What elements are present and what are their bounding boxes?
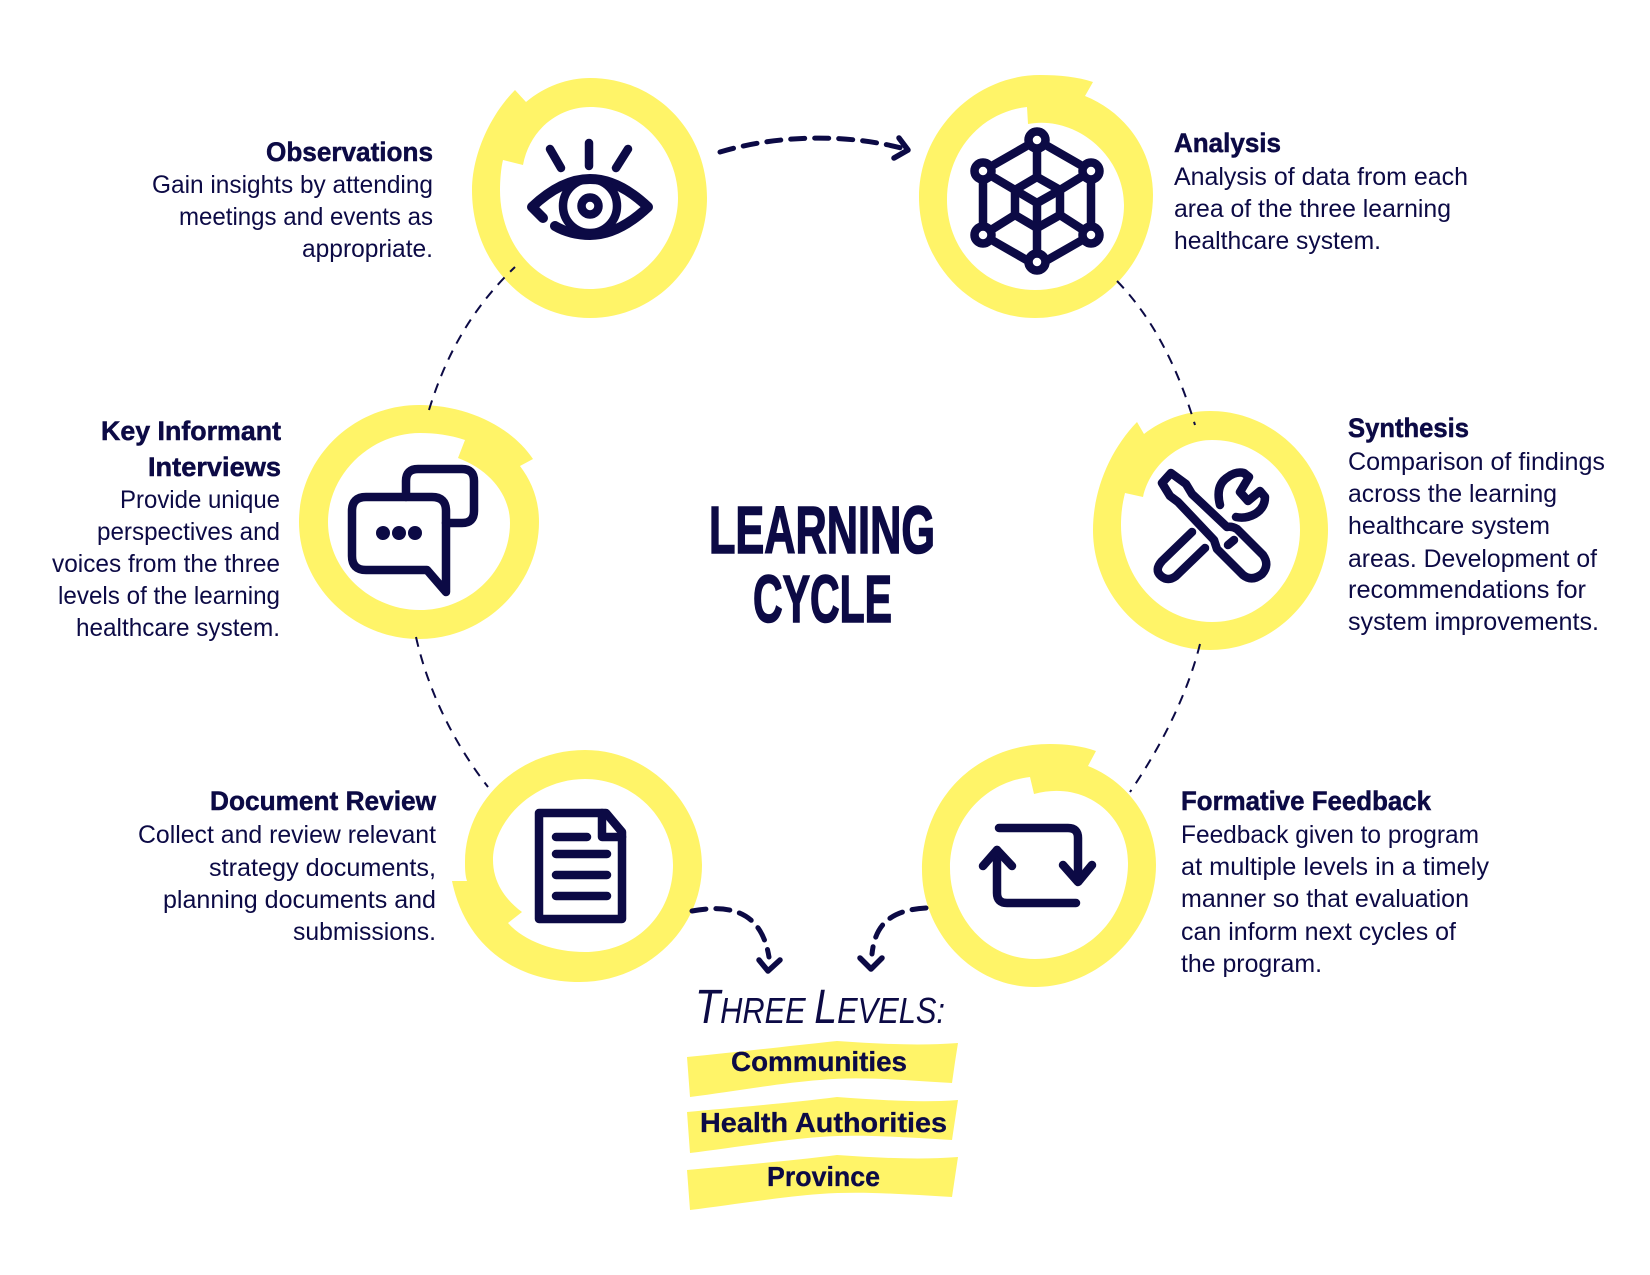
description: synthesis: healthcare system — [1348, 512, 1550, 540]
highlight: province: Province — [767, 1161, 880, 1192]
description: formative feedback — [1181, 821, 1489, 978]
panel: synthesis — [1093, 411, 1605, 650]
description: key informant interviews: levels of the learning — [58, 582, 280, 610]
ring: document review — [452, 750, 702, 982]
description: formative feedback: Feedback given to program — [1181, 821, 1479, 849]
description: synthesis: recommendations for — [1348, 576, 1586, 604]
highlight: communities: Communities — [731, 1046, 907, 1077]
description: synthesis — [1348, 448, 1605, 636]
description: key informant interviews: healthcare system. — [76, 614, 280, 642]
icon: cycle arrows — [983, 828, 1092, 903]
description: document review: planning documents and — [163, 886, 436, 914]
arrow: document review to three levels — [692, 909, 780, 971]
title: LEARNING — [709, 493, 935, 568]
description: key informant interviews — [52, 486, 280, 642]
description: document review — [138, 821, 436, 946]
icon: crossed tools — [1158, 472, 1266, 579]
description: observations: Gain insights by attending — [152, 171, 433, 199]
heading: observations: Observations — [266, 137, 433, 167]
description: synthesis: areas. Development of — [1348, 545, 1597, 573]
title: CYCLE — [753, 562, 892, 637]
heading: synthesis: Synthesis — [1348, 413, 1469, 443]
description: analysis: area of the three learning — [1174, 195, 1451, 223]
ring: synthesis — [1093, 411, 1328, 650]
icon: eye — [532, 143, 648, 235]
heading: key informant interviews: Key Informant — [101, 416, 281, 446]
icon: document — [539, 813, 622, 919]
ring: observations — [472, 78, 707, 318]
description: key informant interviews: voices from the three — [52, 550, 280, 578]
heading: formative feedback: Formative Feedback — [1181, 786, 1432, 816]
description: observations — [152, 171, 433, 263]
ring: analysis — [919, 75, 1153, 318]
description: key informant interviews: Provide unique — [120, 486, 280, 514]
arrow: observations to analysis — [720, 138, 908, 158]
ring: key informant interviews — [299, 405, 539, 639]
highlight: province — [687, 1155, 958, 1210]
heading: three levels: THREE LEVELS: — [695, 981, 945, 1034]
panel: formative feedback — [922, 744, 1489, 987]
arrow: formative feedback to three levels — [860, 908, 926, 969]
highlight: health authorities — [687, 1097, 958, 1153]
ring: formative feedback — [922, 744, 1156, 987]
description: observations: meetings and events as — [179, 203, 433, 231]
description: synthesis: system improvements. — [1348, 608, 1599, 636]
arrow: key informant to observations — [429, 267, 515, 410]
heading: key informant interviews: Interviews — [148, 452, 281, 482]
panel: document review — [138, 750, 702, 982]
title — [709, 493, 935, 637]
panel: key informant interviews — [52, 405, 539, 642]
icon: speech bubbles — [352, 469, 474, 592]
arrow: analysis to synthesis — [1117, 281, 1195, 425]
heading: document review: Document Review — [210, 786, 437, 816]
icon: network cube — [974, 132, 1100, 270]
arrow: synthesis to formative feedback — [1130, 644, 1200, 792]
highlight: health authorities: Health Authorities — [700, 1107, 947, 1138]
panel: analysis — [919, 75, 1468, 318]
panel: three levels — [687, 981, 958, 1210]
panel: observations — [152, 78, 707, 318]
heading: analysis: Analysis — [1174, 128, 1281, 158]
description: observations: appropriate. — [302, 235, 433, 263]
description: formative feedback: at multiple levels in a timely — [1181, 853, 1489, 881]
heading: key informant interviews — [101, 416, 281, 482]
description: document review: strategy documents, — [209, 854, 436, 882]
description: synthesis: Comparison of findings — [1348, 448, 1605, 476]
description: analysis: healthcare system. — [1174, 227, 1381, 255]
description: document review: Collect and review relevant — [138, 821, 436, 849]
highlight: communities — [687, 1041, 958, 1097]
description: document review: submissions. — [293, 918, 436, 946]
description: analysis: Analysis of data from each — [1174, 163, 1468, 191]
description: synthesis: across the learning — [1348, 480, 1557, 508]
description: analysis — [1174, 163, 1468, 255]
description: formative feedback: can inform next cycles of — [1181, 918, 1456, 946]
description: formative feedback: the program. — [1181, 950, 1322, 978]
description: key informant interviews: perspectives and — [97, 518, 280, 546]
description: formative feedback: manner so that evaluation — [1181, 885, 1469, 913]
arrow: document review to key informant — [416, 637, 488, 787]
